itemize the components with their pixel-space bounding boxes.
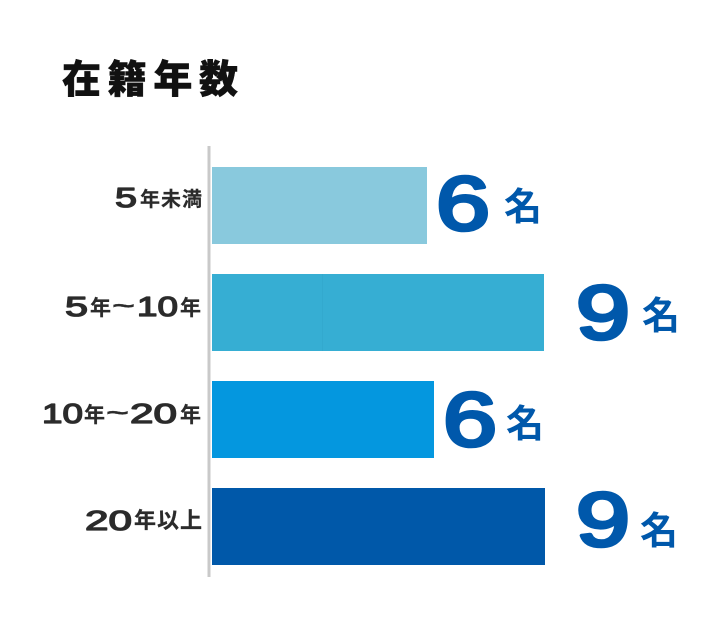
label: 5年~10年: 年	[180, 297, 201, 320]
label: 10年~20年: 20	[130, 398, 177, 429]
value: 9名	[576, 271, 680, 356]
row: 5年未満	[115, 162, 542, 247]
value: 6名: 名	[504, 187, 542, 229]
axis line	[208, 146, 210, 577]
title: 在籍年数	[62, 59, 238, 102]
label: 5年~10年: 年	[90, 297, 111, 320]
value: 9名: 9	[576, 478, 630, 563]
value: 6名	[443, 378, 544, 463]
label: 10年~20年: 年	[180, 404, 201, 427]
value: 6名: 名	[506, 404, 544, 446]
label: 5年未満: 年未満	[140, 188, 202, 211]
value: 6名: 6	[443, 378, 497, 463]
bar: 5年~10年	[212, 274, 544, 351]
bar: 5年未満	[212, 167, 427, 244]
value: 9名: 名	[642, 296, 680, 338]
row: 5年~10年	[65, 271, 680, 356]
value: 9名: 名	[640, 511, 678, 553]
label: 5年~10年: 10	[137, 291, 178, 322]
value: 6名	[436, 162, 542, 247]
value: 9名	[576, 478, 678, 563]
label: 10年~20年: ~	[106, 400, 129, 425]
bar: 10年~20年	[212, 381, 434, 458]
label: 5年~10年	[65, 291, 201, 322]
label: 5年未満	[115, 182, 202, 213]
row: 10年~20年	[42, 378, 544, 463]
label: 20年以上	[85, 505, 202, 536]
label: 10年~20年	[42, 398, 201, 429]
label: 5年~10年: 5	[65, 291, 88, 322]
value: 6名: 6	[436, 162, 490, 247]
label: 5年~10年: ~	[112, 293, 135, 318]
row: 20年以上	[85, 478, 678, 565]
label: 10年~20年: 10	[42, 398, 83, 429]
label: 5年未満: 5	[115, 182, 137, 213]
label: 20年以上: 20	[85, 505, 132, 536]
label: 20年以上: 年以上	[134, 508, 202, 533]
bar: 20年以上	[212, 488, 545, 565]
label: 10年~20年: 年	[84, 404, 105, 427]
value: 9名: 9	[576, 271, 630, 356]
